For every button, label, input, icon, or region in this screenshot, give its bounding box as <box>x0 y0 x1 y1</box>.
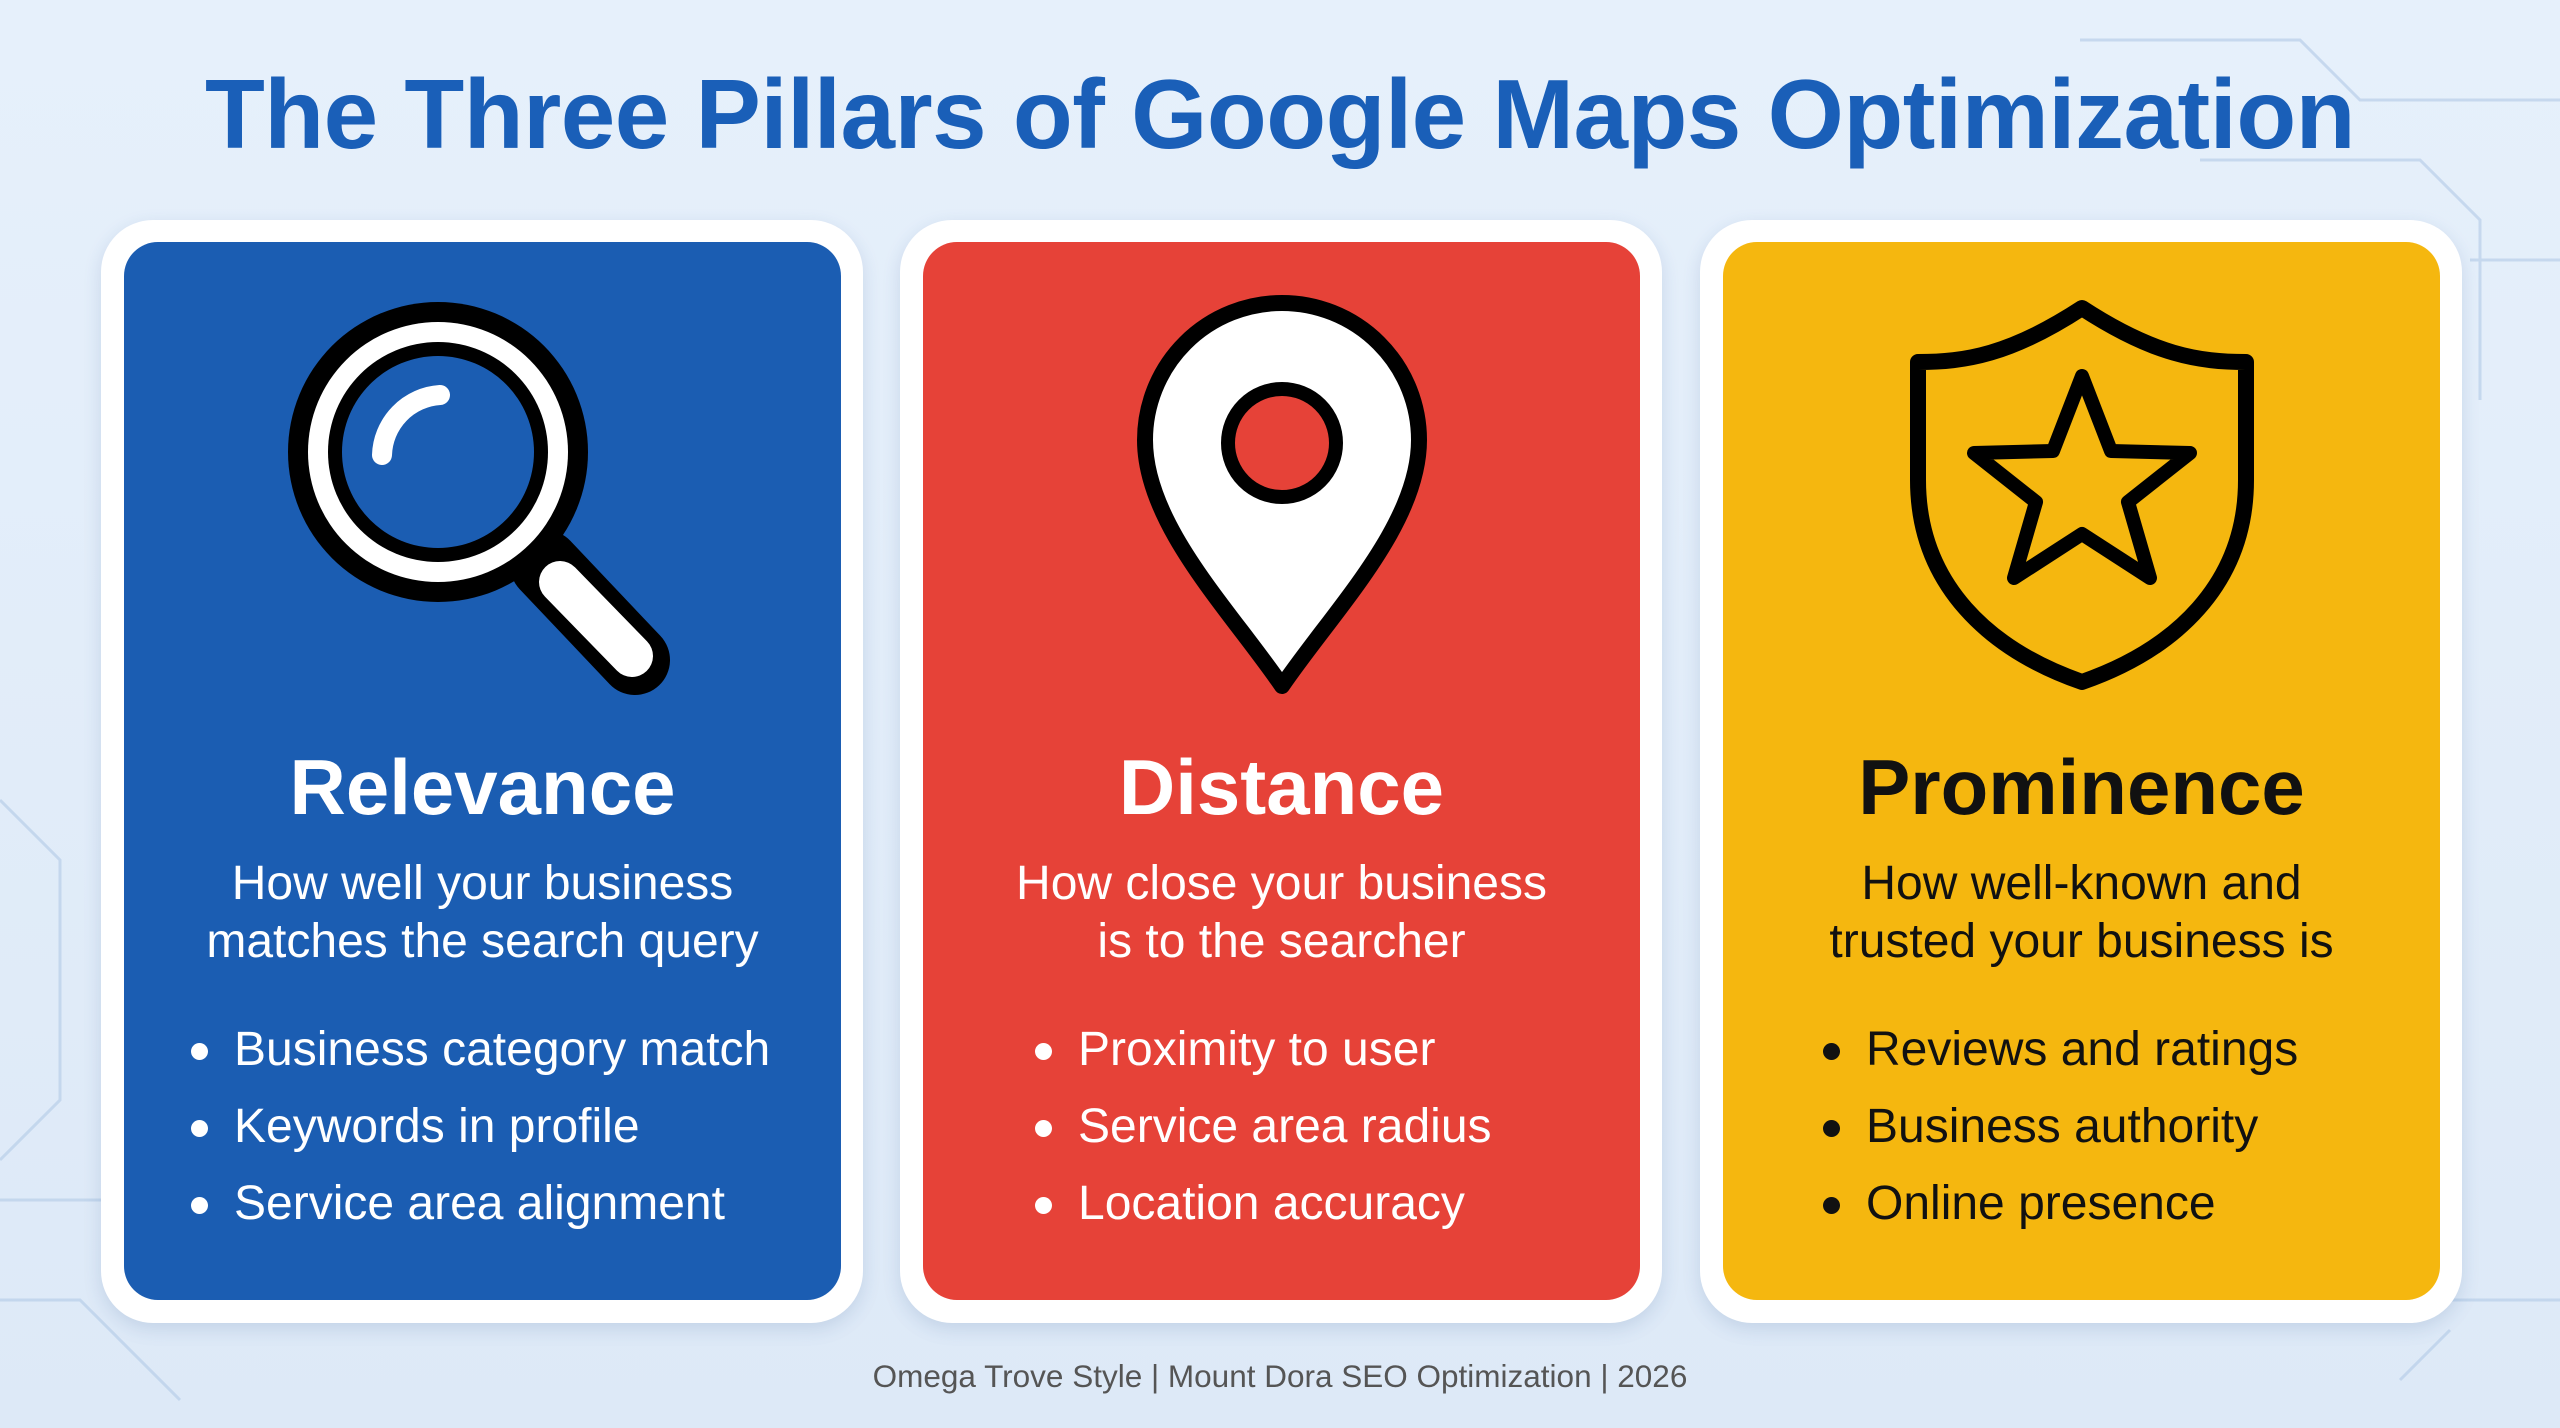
footer: Omega Trove Style | Mount Dora SEO Optimization | 2026 <box>873 1358 1687 1394</box>
panel: relevance <box>101 220 863 1323</box>
icon: shield star <box>1910 300 2254 690</box>
description: matches the search query <box>206 915 759 968</box>
icon: magnifier <box>288 302 670 695</box>
bullets: Online presence <box>1866 1177 2216 1230</box>
description: How well your business <box>232 857 733 910</box>
bullets: Location accuracy <box>1078 1177 1465 1230</box>
icon: map pin <box>1137 295 1427 694</box>
description: How well-known and <box>1861 857 2302 910</box>
bullets: Reviews and ratings <box>1866 1023 2298 1076</box>
description: How close your business <box>1016 857 1547 910</box>
heading: Relevance <box>290 743 675 831</box>
description <box>1829 857 2334 968</box>
panel: prominence <box>1700 220 2462 1323</box>
bullets: Service area radius <box>1078 1100 1492 1153</box>
panel: distance <box>900 220 1662 1323</box>
bullets: Keywords in profile <box>234 1100 640 1153</box>
heading: Prominence <box>1858 743 2305 831</box>
heading: Distance <box>1119 743 1444 831</box>
bullets: Service area alignment <box>234 1177 725 1230</box>
description: trusted your business is <box>1829 915 2334 968</box>
description <box>206 857 759 968</box>
bullets <box>191 1023 770 1230</box>
description: is to the searcher <box>1097 915 1466 968</box>
title: The Three Pillars of Google Maps Optimization <box>205 59 2355 169</box>
bullets: Proximity to user <box>1078 1023 1435 1076</box>
bullets: Business category match <box>234 1023 770 1076</box>
description <box>1016 857 1547 968</box>
bullets: Business authority <box>1866 1100 2258 1153</box>
bullets <box>1035 1023 1492 1230</box>
bullets <box>1823 1023 2298 1230</box>
